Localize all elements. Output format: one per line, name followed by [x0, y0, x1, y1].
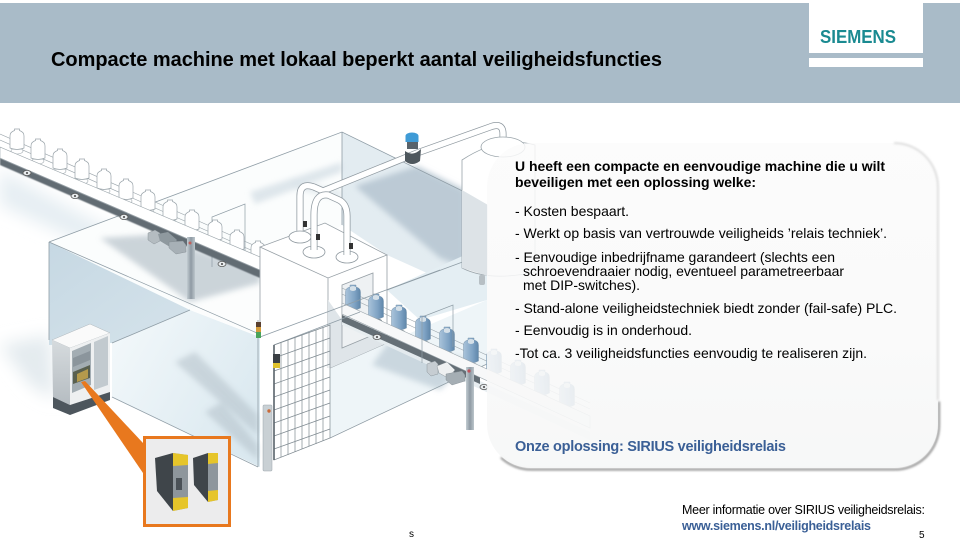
benefit list: met DIP-switches). [523, 277, 640, 293]
benefit list: schroevendraaier nodig, eventueel parametreerbaar [523, 263, 844, 279]
lower motor and leg [427, 361, 474, 430]
footer link: Meer informatie over SIRIUS veiligheidsrelais: [682, 503, 925, 517]
solution heading: Onze oplossing: SIRIUS veiligheidsrelais [515, 439, 786, 455]
machine scene [0, 126, 590, 525]
safety mesh fence [274, 325, 330, 460]
control cabinet [52, 324, 110, 415]
machine housing [260, 195, 387, 368]
orange callout box with relays [144, 438, 230, 526]
information panel [487, 143, 939, 470]
relay: small [193, 453, 218, 502]
benefit list: - Stand-alone veiligheidstechniek biedt zonder (fail-safe) PLC. [515, 300, 897, 316]
relay: large [155, 453, 188, 511]
upper motor and leg [148, 230, 195, 299]
storage tank [462, 137, 535, 285]
intro heading: beveiligen met een oplossing welke: [515, 174, 756, 190]
orange callout wedge [81, 381, 143, 473]
footer link: www.siemens.nl/veiligheidsrelais [681, 519, 871, 533]
benefit list: - Eenvoudig is in onderhoud. [515, 322, 692, 338]
valve [405, 132, 421, 164]
benefit list [515, 203, 897, 361]
benefit list: - Eenvoudige inbedrijfname garandeert (slechts een [515, 249, 835, 265]
safety sensor [273, 354, 280, 368]
intro heading [515, 158, 885, 190]
pipes [300, 126, 503, 237]
benefit list: - Kosten bespaart. [515, 203, 629, 219]
upper conveyor with white bottles [0, 129, 265, 278]
title: Compacte machine met lokaal beperkt aantal veiligheidsfuncties [51, 49, 662, 71]
e-stop post [263, 405, 272, 471]
Siemens logo [809, 3, 923, 67]
soft floor shadows [0, 170, 140, 400]
enclosure walls [49, 132, 530, 467]
benefit list: - Werkt op basis van vertrouwde veiligheids ’relais techniek’. [515, 225, 887, 241]
Siemens logo: SIEMENS [820, 27, 896, 47]
lower conveyor with blue bottles [260, 270, 590, 440]
footer link [681, 503, 925, 533]
header band [0, 3, 960, 103]
light tower [256, 322, 261, 338]
benefit list: -Tot ca. 3 veiligheidsfuncties eenvoudig te realiseren zijn. [515, 345, 867, 361]
intro heading: U heeft een compacte en eenvoudige machine die u wilt [515, 158, 885, 174]
pipe flanges [289, 231, 358, 263]
